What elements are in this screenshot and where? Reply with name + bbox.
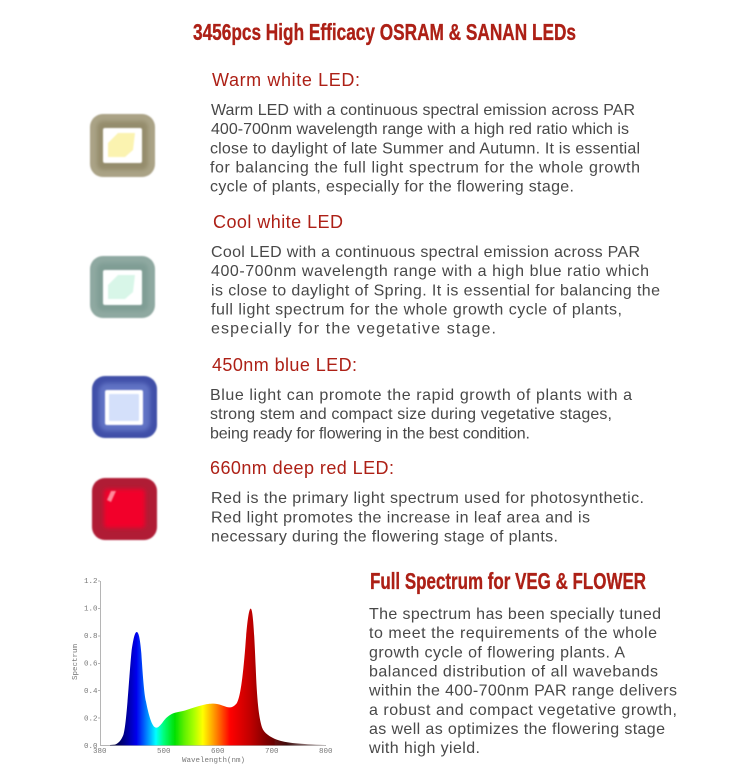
chart curve xyxy=(110,609,325,745)
text block: full spectrum description xyxy=(368,606,677,757)
text block: red description xyxy=(211,490,644,546)
text block: blue description: Blue light can promote the rapid growth of plants with a xyxy=(210,387,632,404)
text block: warm white description: cycle of plants, especially for the flowering stage. xyxy=(210,178,574,196)
x axis labels: 500 xyxy=(157,748,171,756)
y axis labels: 1.2 xyxy=(84,578,98,586)
text block: full spectrum description: growth cycle of flowering plants. A xyxy=(369,644,625,662)
text block: warm white description xyxy=(210,102,640,196)
y axis labels: 0.2 xyxy=(84,716,98,724)
text block: warm white description: Warm LED with a continuous spectral emission across PAR xyxy=(211,102,635,119)
chart: light spectrum xyxy=(72,578,333,765)
text block: cool white description xyxy=(211,244,660,338)
text block: blue description xyxy=(210,387,632,442)
x axis title: Wavelength(nm) xyxy=(182,757,245,765)
heading: warm white LED: Warm white LED: xyxy=(212,70,360,90)
text block: warm white description: 400-700nm wavelength range with a high red ratio which is xyxy=(211,121,629,138)
chart axes xyxy=(98,581,326,746)
text block: red description: Red light promotes the increase in leaf area and is xyxy=(211,510,590,526)
text block: full spectrum description: to meet the requirements of the whole xyxy=(369,625,657,642)
y axis labels: 0.8 xyxy=(84,633,98,641)
icon: blue LED chip xyxy=(92,376,157,438)
title: 3456pcs High Efficacy OSRAM & SANAN LEDs xyxy=(193,19,576,45)
text block: red description: Red is the primary light spectrum used for photosynthetic. xyxy=(211,490,644,507)
y axis labels: 0.6 xyxy=(84,660,98,668)
text block: blue description: being ready for flowering in the best condition. xyxy=(210,426,530,442)
text block: cool white description: full light spectrum for the whole growth cycle of plants, xyxy=(211,302,622,318)
text block: full spectrum description: with high yield. xyxy=(368,740,480,757)
y axis labels: 0.4 xyxy=(84,688,98,696)
y axis labels: 1.0 xyxy=(84,606,98,614)
panel: cool white LED xyxy=(90,212,660,338)
x axis labels: 600 xyxy=(211,748,225,756)
heading: 660nm deep red LED: 660nm deep red LED: xyxy=(210,458,394,478)
icon: warm white LED chip xyxy=(90,114,155,177)
text block: cool white description: 400-700nm wavelength range with a high blue ratio which xyxy=(211,263,649,280)
text block: cool white description: is close to daylight of Spring. It is essential for balancing the xyxy=(211,282,660,300)
panel: full spectrum xyxy=(368,568,677,757)
icon: red LED chip xyxy=(92,478,157,540)
text block: warm white description: close to daylight of late Summer and Autumn. It is essential xyxy=(210,140,640,158)
x axis labels: 380 xyxy=(93,748,107,756)
text block: cool white description: especially for the vegetative stage. xyxy=(211,320,496,338)
y axis title: Spectrum xyxy=(72,643,80,680)
text block: full spectrum description: as well as optimizes the flowering stage xyxy=(369,721,665,738)
text block: full spectrum description: The spectrum has been specially tuned xyxy=(369,606,661,623)
text block: full spectrum description: within the 400-700nm PAR range delivers xyxy=(368,682,677,700)
icon: cool white LED chip xyxy=(90,256,155,318)
panel: warm white LED xyxy=(90,70,640,196)
text block: cool white description: Cool LED with a continuous spectral emission across PAR xyxy=(211,244,640,261)
panel: 450nm blue LED xyxy=(92,355,632,442)
heading: 450nm blue LED: 450nm blue LED: xyxy=(212,355,357,375)
text block: full spectrum description: balanced distribution of all wavebands xyxy=(369,664,658,680)
y axis labels xyxy=(84,578,98,751)
y axis labels: 0.0 xyxy=(84,743,98,751)
text block: warm white description: for balancing the full light spectrum for the whole growth xyxy=(210,160,640,176)
x axis labels: 700 xyxy=(265,748,279,756)
text block: red description: necessary during the flowering stage of plants. xyxy=(211,528,558,546)
panel: 660nm deep red LED xyxy=(92,458,644,546)
x axis labels xyxy=(93,748,333,756)
heading: cool white LED: Cool white LED xyxy=(213,212,343,232)
text block: blue description: strong stem and compact size during vegetative stages, xyxy=(210,406,612,423)
x axis labels: 800 xyxy=(319,748,333,756)
heading: full spectrum: Full Spectrum for VEG & FLOWER xyxy=(370,568,646,594)
text block: full spectrum description: a robust and compact vegetative growth, xyxy=(369,702,677,719)
